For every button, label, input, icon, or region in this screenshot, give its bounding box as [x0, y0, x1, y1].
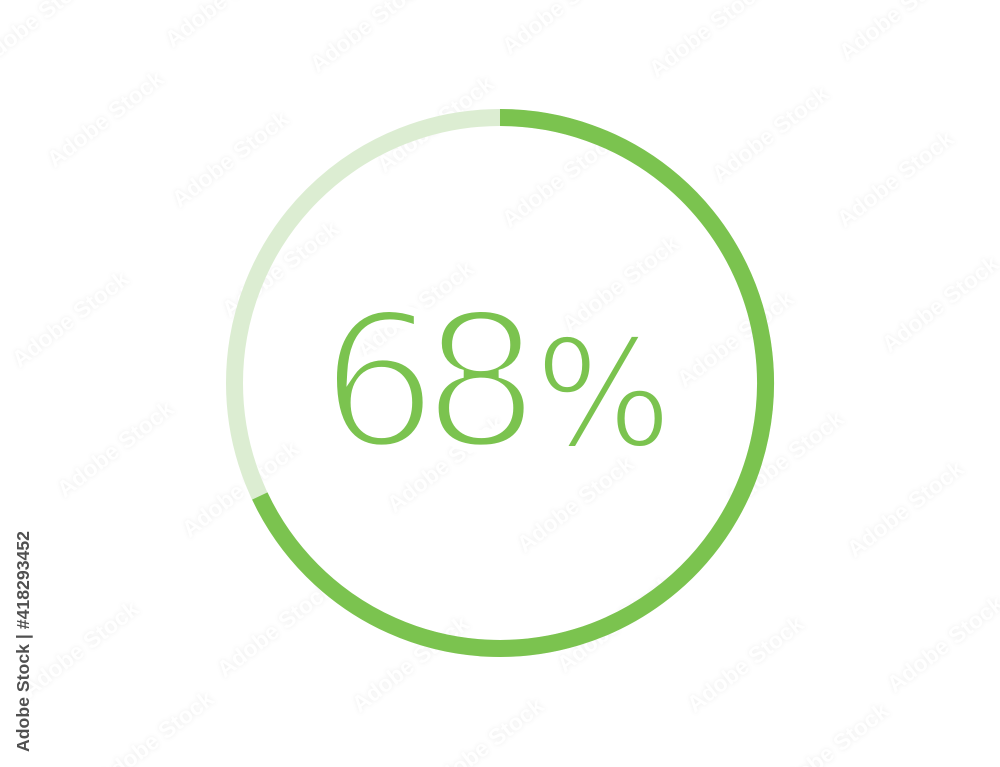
watermark pattern: Adobe Stock [552, 570, 679, 677]
watermark pattern: Adobe Stock [42, 65, 169, 172]
watermark pattern: Adobe Stock [352, 255, 479, 362]
digit 8: 8 [422, 273, 540, 490]
percentage value: 68% [320, 273, 672, 490]
watermark pattern: Adobe Stock [832, 125, 959, 232]
watermark pattern: Adobe Stock [347, 610, 474, 717]
percent sign: % [535, 307, 672, 482]
watermark pattern: Adobe Stock [177, 435, 304, 542]
watermark pattern: Adobe Stock [722, 405, 849, 512]
watermark pattern: Adobe Stock [17, 595, 144, 702]
watermark pattern: Adobe Stock [52, 395, 179, 502]
progress ring [234, 117, 766, 649]
watermark pattern: Adobe Stock [557, 230, 684, 337]
stock id caption: Adobe Stock | #418293452 [13, 531, 33, 752]
watermark pattern: Adobe Stock [382, 410, 509, 517]
watermark pattern: Adobe Stock [217, 215, 344, 322]
watermark pattern: Adobe Stock [512, 450, 639, 557]
watermark pattern: Adobe Stock [497, 125, 624, 232]
watermark pattern: Adobe Stock [842, 455, 969, 562]
digit 6: 6 [320, 273, 438, 490]
watermark pattern: Adobe Stock [372, 70, 499, 177]
watermark pattern: Adobe Stock [167, 105, 294, 212]
ring track: remaining 32 percent [234, 118, 766, 648]
watermark pattern: Adobe Stock [707, 80, 834, 187]
watermark pattern: Adobe Stock [672, 285, 799, 392]
watermark pattern: Adobe Stock [877, 250, 1000, 357]
watermark pattern: Adobe Stock [682, 610, 809, 717]
watermark pattern: Adobe Stock [7, 265, 134, 372]
ring arc: filled 68 percent [260, 117, 766, 649]
watermark pattern: Adobe Stock [212, 575, 339, 682]
